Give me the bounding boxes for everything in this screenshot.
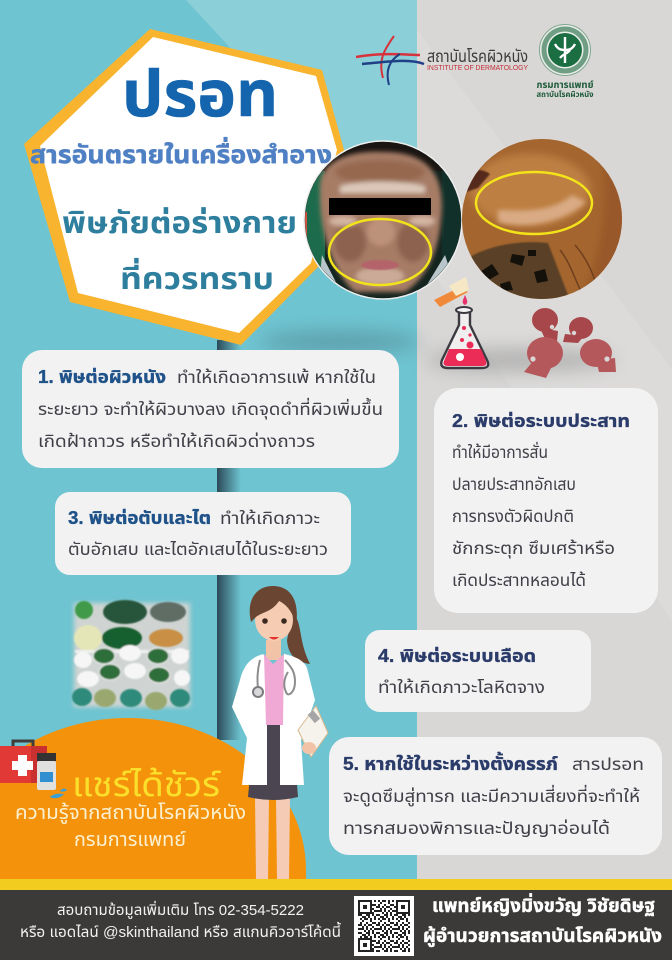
title line: should know: ที่ควรทราบ — [120, 257, 274, 296]
icon: flask with test tube — [434, 277, 488, 368]
illustration: doctor — [232, 586, 328, 879]
panel 1: skin toxicity: เกิดฝ้าถาวร หรือทำให้เกิดผิวด่างถาวร — [38, 431, 315, 451]
title line: toxic to the body: พิษภัยต่อร่างกาย — [62, 207, 297, 240]
panel 2: nervous system toxicity: เกิดประสาทหลอนได้ — [452, 570, 586, 590]
shirt — [264, 654, 284, 725]
panel 3: liver and kidney toxicity: ทำให้เกิดภาวะ — [220, 508, 320, 528]
panel 4: blood toxicity: ทำให้เกิดภาวะโลหิตจาง — [378, 677, 545, 697]
title subtitle: dangerous substance in cosmetics: สารอันตรายในเครื่องสำอาง — [30, 137, 332, 169]
clipboard and hand — [298, 706, 328, 757]
footer — [0, 879, 672, 960]
neck — [266, 640, 281, 660]
logo: department of medical services: กรมการแพทย์ — [536, 80, 594, 91]
footer: หรือ แอดไลน์ @skinthailand หรือ สแกนคิวอาร์โค้ดนี้ — [20, 921, 341, 941]
panel 2: nervous system toxicity: การทรงตัวผิดปกติ — [452, 507, 574, 526]
highlight ring — [476, 172, 592, 234]
panel 5: pregnancy risk: จะดูดซึมสู่ทารก และมีความเสี่ยงที่จะทำให้ — [343, 784, 640, 808]
QR code — [354, 896, 414, 956]
lab coat — [232, 654, 315, 785]
logo: department of medical services: สถาบันโรคผิวหนัง — [536, 90, 594, 99]
panel 1: skin toxicity: ระยะยาว จะทำให้ผิวบางลง เกิดจุดดำที่ผิวเพิ่มขึ้น — [38, 397, 383, 420]
photo: face with melasma — [303, 141, 465, 301]
heading: 4. พิษต่อระบบเลือด — [378, 646, 536, 666]
panel 2: nervous system toxicity: ชักกระตุก ซึมเศร้าหรือ — [452, 538, 615, 559]
panel 2: nervous system toxicity: ทำให้มีอาการสั่น — [452, 441, 548, 462]
panel 4: blood toxicity — [365, 630, 591, 712]
panel 3: liver and kidney toxicity — [55, 492, 351, 575]
heading: share with confidence: แชร์ได้ชัวร์ — [72, 766, 222, 804]
orange semicircle: share panel — [0, 718, 306, 879]
photo: skin cream jars — [72, 600, 190, 710]
face — [255, 599, 293, 641]
panel 2: nervous system toxicity — [434, 388, 658, 613]
contact text: สอบถามข้อมูลเพิ่มเติม โทร 02-354-5222 — [57, 900, 304, 919]
logo: institute of dermatology — [356, 36, 528, 85]
panel 1: skin toxicity: ทำให้เกิดอาการแพ้ หากใช้ใน — [177, 367, 376, 387]
director title: ผู้อำนวยการสถาบันโรคผิวหนัง — [423, 925, 662, 947]
panel 2: nervous system toxicity: ปลายประสาทอักเสบ — [452, 475, 576, 494]
panel 5: pregnancy risk: สารปรอท — [572, 755, 644, 774]
panel 1: skin toxicity — [22, 350, 399, 468]
panel 3: liver and kidney toxicity: ตับอักเสบ และไตอักเสบได้ในระยะยาว — [68, 539, 328, 559]
icon: first aid kit and bottle — [0, 741, 67, 798]
heading: 1. พิษต่อผิวหนัง — [38, 367, 166, 387]
logo: department of medical services — [536, 24, 594, 99]
legs — [255, 798, 290, 879]
skirt — [248, 720, 298, 800]
director name: แพทย์หญิงมิ่งขวัญ วิชัยดิษฐ — [432, 893, 655, 917]
photo: chin with vitiligo patches — [460, 139, 630, 300]
title hexagon badge — [24, 29, 344, 345]
heading: 5. หากใช้ในระหว่างตั้งครรภ์ — [343, 752, 558, 774]
censor bar — [329, 198, 431, 215]
logo: institute of dermatology: INSTITUTE OF DERMATOLOGY — [427, 63, 528, 72]
heading: 2. พิษต่อระบบประสาท — [452, 411, 630, 431]
stethoscope — [258, 660, 295, 694]
title: mercury: ปรอท — [122, 58, 278, 130]
hair — [250, 586, 297, 625]
logo: institute of dermatology: สถาบันโรคผิวหนัง — [427, 47, 528, 66]
panel 5: pregnancy risk: ทารกสมองพิการและปัญญาอ่อนได้ — [343, 818, 610, 838]
icon: skulls — [524, 308, 616, 378]
highlight ring — [329, 219, 431, 285]
panel 5: pregnancy risk — [329, 737, 662, 855]
text: knowledge from the institute: ความรู้จากสถาบันโรคผิวหนัง — [15, 801, 246, 825]
ponytail — [287, 612, 310, 664]
heading: 3. พิษต่อตับและไต — [68, 508, 211, 528]
text: department of medical services: กรมการแพทย์ — [74, 829, 186, 851]
